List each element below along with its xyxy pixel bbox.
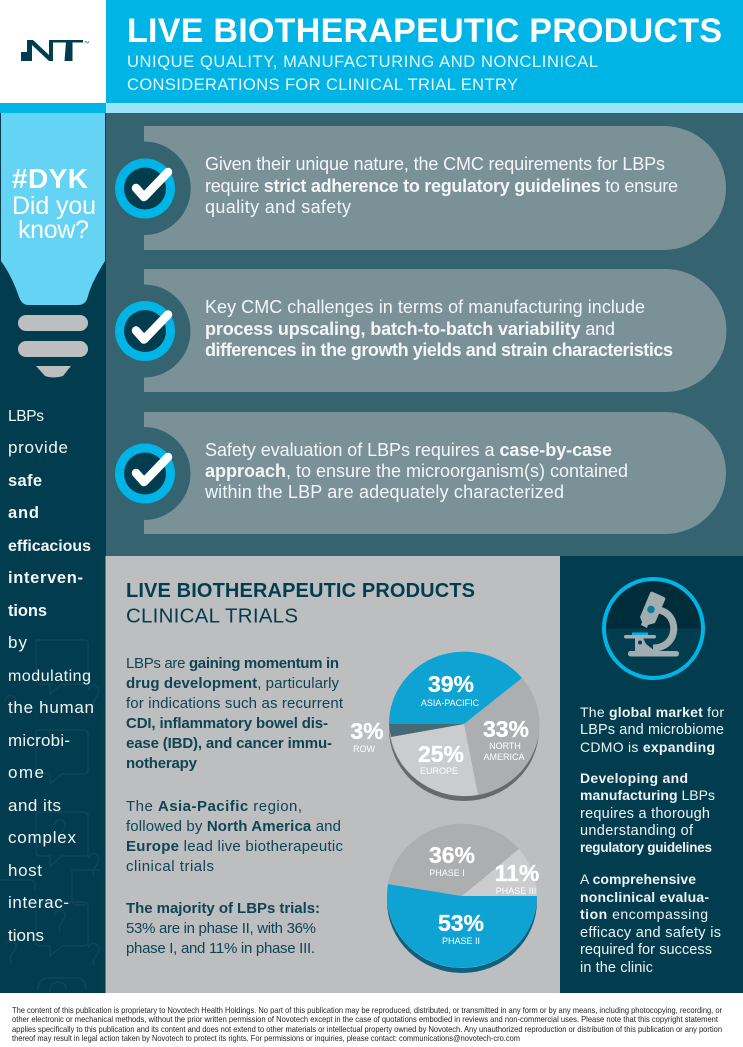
left column text: tions (8, 926, 44, 945)
pie chart: region: ROW (353, 744, 376, 754)
market text: regulatory guidelines (580, 840, 712, 855)
market text: The global market for (580, 704, 724, 720)
left column text: the human (8, 698, 94, 717)
point 3: approach, to ensure the microorganism(s) contained (205, 461, 628, 481)
point 3: within the LBP are adequately characterized (204, 482, 564, 502)
pie chart: region (350, 652, 539, 801)
pie chart: region: 25% (418, 741, 464, 767)
market text: Developing and (580, 770, 688, 786)
left column background (0, 113, 106, 993)
pie chart: region: 39% (428, 671, 474, 697)
left column text: safe (8, 472, 42, 490)
lightbulb icon (1, 113, 105, 378)
pie chart: region: AMERICA (483, 752, 525, 762)
market text (580, 704, 724, 976)
pie chart: phase (387, 824, 539, 973)
panel: market (560, 556, 743, 993)
point 1: Given their unique nature, the CMC requirements for LBPs (205, 154, 665, 174)
point 1: require strict adherence to regulatory guidelines to ensure (205, 176, 678, 196)
clinical trials text: Europe lead live biotherapeutic (126, 838, 344, 855)
market text: efficacy and safety is (580, 925, 721, 941)
left column text: ome (8, 763, 44, 782)
clinical trials text: The majority of LBPs trials: (126, 900, 320, 917)
market text: understanding of (580, 823, 694, 839)
subtitle: UNIQUE QUALITY, MANUFACTURING AND NONCLINICAL (127, 53, 598, 71)
market text: manufacturing LBPs (580, 787, 715, 803)
clinical trials text: phase I, and 11% in phase III. (126, 940, 315, 957)
point 1 (115, 126, 726, 250)
clinical trials text: followed by North America and (126, 818, 341, 835)
question mark pattern (0, 640, 100, 992)
left column text: and (8, 504, 39, 522)
pie chart: phase: 53% (438, 910, 484, 936)
left column text: host (8, 861, 42, 880)
logo (21, 40, 89, 61)
pie chart: region: EUROPE (420, 766, 458, 776)
market text: tion encompassing (580, 906, 708, 922)
point 2 (115, 269, 726, 392)
pie chart: phase: PHASE III (496, 886, 536, 896)
subtitle (127, 53, 598, 94)
left column text: microbi- (8, 731, 70, 750)
clinical trials heading: LIVE BIOTHERAPEUTIC PRODUCTS (126, 580, 475, 602)
pie chart: phase: PHASE I (429, 868, 465, 878)
#DYK heading: know? (18, 216, 89, 244)
clinical trials text: CDI, inflammatory bowel dis- (126, 715, 328, 732)
panel: clinical trials (106, 556, 560, 993)
market text: required for success (580, 942, 712, 958)
point 3: Safety evaluation of LBPs requires a case-by-case (205, 440, 612, 460)
panel: key considerations (106, 113, 743, 556)
clinical trials text: drug development, particularly (126, 675, 340, 692)
left column text: tions (8, 602, 47, 620)
point 3 (115, 412, 726, 534)
left column text: provide (8, 438, 68, 457)
point 2: differences in the growth yields and strain characteristics (205, 340, 673, 360)
#DYK heading (12, 163, 96, 244)
left column text: efficacious (8, 538, 91, 555)
pie chart: region: ASIA-PACIFIC (421, 698, 480, 708)
clinical trials text: LBPs are gaining momentum in (126, 655, 339, 672)
header banner (0, 0, 743, 113)
market text: LBPs and microbiome (580, 722, 724, 738)
clinical trials text: notherapy (126, 755, 198, 772)
footer disclaimer: thereof may result in legal action taken by Novotech to protect its rights. For permissions or inquiries, please contact: communications@novotech-cro.com (12, 1033, 520, 1043)
market text: requires a thorough (580, 806, 710, 822)
market text: A comprehensive (580, 871, 696, 887)
pie chart: region: NORTH (489, 741, 521, 751)
logo: TM (84, 40, 89, 44)
#DYK heading: Did you (12, 192, 96, 220)
left column text: interven- (8, 569, 83, 587)
pie chart: phase: PHASE II (442, 936, 480, 946)
pie chart: phase: 11% (495, 860, 539, 886)
clinical trials text: The Asia-Pacific region, (126, 798, 302, 815)
clinical trials text: ease (IBD), and cancer immu- (126, 735, 332, 752)
left column text: and its (8, 796, 61, 815)
pie chart: phase: 36% (429, 842, 475, 868)
clinical trials heading (126, 580, 475, 628)
left column text: complex (8, 828, 76, 847)
point 1: quality and safety (205, 197, 351, 217)
subtitle: CONSIDERATIONS FOR CLINICAL TRIAL ENTRY (127, 76, 518, 94)
clinical trials text (126, 655, 344, 957)
left column text: interac- (8, 893, 69, 912)
left column text: LBPs (8, 408, 44, 425)
market text: CDMO is expanding (580, 739, 715, 755)
pie chart: region: 33% (483, 716, 529, 742)
point 2: process upscaling, batch-to-batch variability and (205, 319, 615, 339)
#DYK heading: #DYK (12, 163, 88, 194)
clinical trials text: clinical trials (126, 858, 214, 875)
market text: in the clinic (580, 960, 653, 976)
pie chart: region: 3% (350, 718, 384, 744)
left column text: modulating (8, 668, 91, 685)
left column text (8, 408, 94, 945)
clinical trials text: 53% are in phase II, with 36% (126, 920, 316, 937)
title: LIVE BIOTHERAPEUTIC PRODUCTS (127, 12, 722, 50)
clinical trials heading: CLINICAL TRIALS (126, 604, 298, 628)
footer disclaimer (12, 1005, 722, 1043)
point 2: Key CMC challenges in terms of manufacturing include (205, 297, 645, 317)
icon: microscope (604, 579, 703, 678)
clinical trials text: for indications such as recurrent (126, 695, 344, 712)
left column text: by (8, 633, 28, 652)
market text: nonclinical evalua- (580, 889, 709, 905)
